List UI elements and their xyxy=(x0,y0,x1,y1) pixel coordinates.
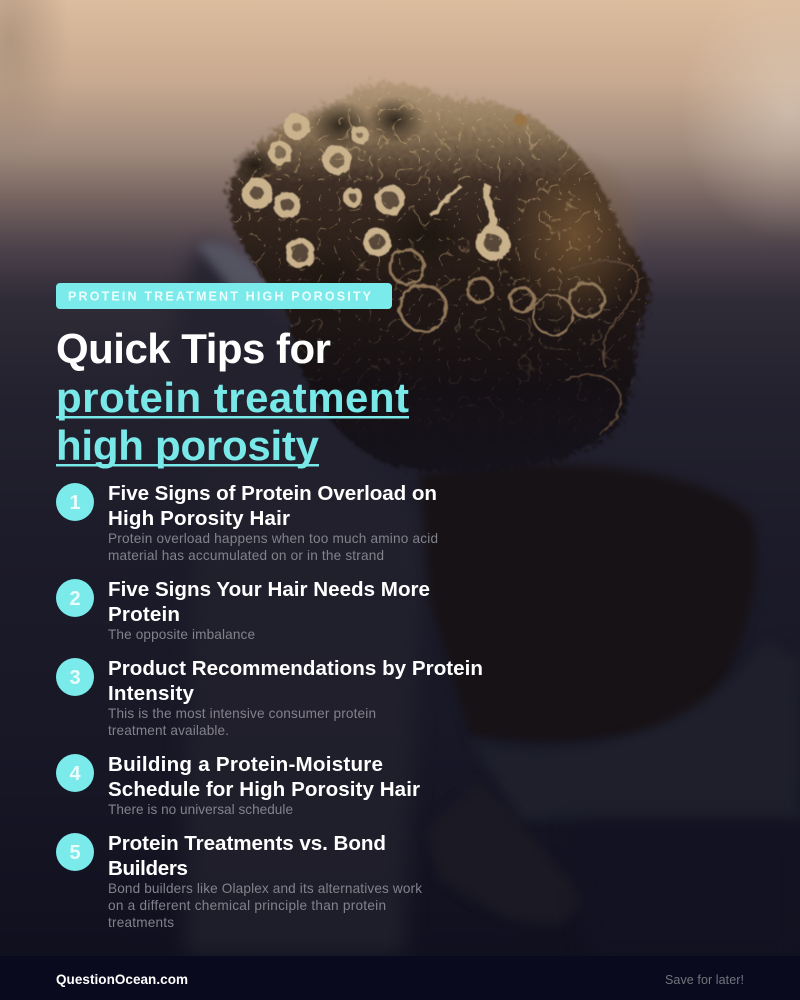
tip 2: 2 xyxy=(69,588,81,610)
tip 5: 5 xyxy=(69,842,81,864)
tip 4: Schedule for High Porosity Hair xyxy=(108,778,420,801)
tip 1: Five Signs of Protein Overload on xyxy=(108,482,437,505)
tip 5: Bond builders like Olaplex and its alternatives work xyxy=(108,881,422,896)
title: Quick Tips for xyxy=(56,325,331,372)
tip 2: The opposite imbalance xyxy=(108,627,255,642)
tip 4: 4 xyxy=(69,763,81,785)
tip 1 xyxy=(56,482,438,563)
title: high porosity xyxy=(56,422,320,469)
tip 5: Protein Treatments vs. Bond xyxy=(108,832,386,855)
tip 3: treatment available. xyxy=(108,723,229,738)
tip 2: Protein xyxy=(108,603,180,626)
tip 3: 3 xyxy=(69,667,81,689)
tip 2 xyxy=(56,578,430,642)
tip 1: material has accumulated on or in the strand xyxy=(108,548,384,563)
badge xyxy=(56,283,392,309)
title: protein treatment xyxy=(56,374,409,421)
tip 1: Protein overload happens when too much amino acid xyxy=(108,531,438,546)
tip 3: Intensity xyxy=(108,682,195,705)
tip 3: This is the most intensive consumer protein xyxy=(108,706,376,721)
hair top tufts xyxy=(514,114,526,126)
tip 1: High Porosity Hair xyxy=(108,507,290,530)
tip 5: treatments xyxy=(108,915,174,930)
tip 5: on a different chemical principle than protein xyxy=(108,898,386,913)
footer xyxy=(0,956,800,1000)
tip 4 xyxy=(56,753,420,817)
tip 4: There is no universal schedule xyxy=(108,802,293,817)
title xyxy=(56,325,409,469)
tip 3 xyxy=(56,657,483,738)
tip 5: Builders xyxy=(108,857,188,880)
hand xyxy=(425,780,590,925)
badge: PROTEIN TREATMENT HIGH POROSITY xyxy=(68,290,372,304)
bare back xyxy=(420,464,756,741)
footer: QuestionOcean.com xyxy=(56,972,188,987)
tip 5 xyxy=(56,832,422,930)
curls xyxy=(246,118,638,435)
tip 1: 1 xyxy=(69,492,81,514)
footer: Save for later! xyxy=(665,973,744,987)
top fabric xyxy=(470,640,800,820)
white top and shoulder xyxy=(175,240,430,956)
hair strands texture xyxy=(230,92,647,420)
tip 4: Building a Protein-Moisture xyxy=(108,753,383,776)
tip 2: Five Signs Your Hair Needs More xyxy=(108,578,430,601)
hair mass xyxy=(228,83,650,472)
tip 3: Product Recommendations by Protein xyxy=(108,657,483,680)
